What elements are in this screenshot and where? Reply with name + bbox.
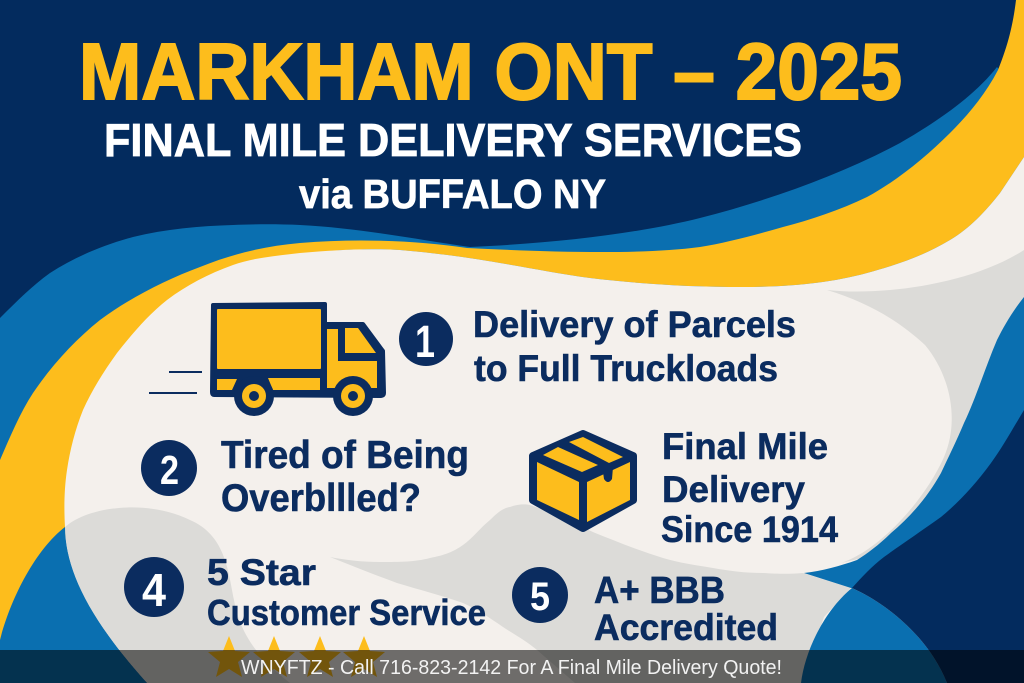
text: final mile since 1914: Final Mile: [662, 426, 828, 467]
rating stars: [208, 636, 385, 677]
text: tired of being overbilled: Overbllled?: [221, 477, 421, 520]
text: 5 star customer service: [207, 552, 486, 633]
badge: 5: 5: [530, 575, 550, 619]
text: final mile since 1914: Delivery: [662, 469, 805, 510]
badge: 1: [399, 312, 453, 367]
icon: parcel box: [533, 434, 633, 528]
badge: 4: 4: [142, 564, 166, 616]
text: 5 star customer service: Customer Service: [207, 592, 486, 633]
text: final mile since 1914: Since 1914: [661, 509, 838, 550]
subtitle: FINAL MILE DELIVERY SERVICES: [104, 114, 802, 166]
text: 5 star customer service: 5 Star: [207, 552, 316, 593]
footer banner: WNYFTZ - Call 716-823-2142 For A Final Mile Delivery Quote!: [241, 656, 782, 679]
badge: 2: 2: [160, 447, 179, 493]
badge: 2: [141, 440, 197, 496]
title: MARKHAM ONT – 2025: [79, 27, 902, 116]
text: final mile since 1914: [661, 426, 838, 550]
background: lower-left blue wave: [0, 527, 147, 683]
badge: 5: [512, 567, 568, 623]
background: left grey wave: [65, 507, 290, 683]
text: delivery of parcels: [473, 304, 796, 389]
background: lower-right blue wave: [801, 588, 947, 683]
text: tired of being overbilled: [221, 434, 469, 520]
text: a+ bbb accredited: Accredited: [594, 607, 778, 648]
footer banner: [0, 650, 1024, 683]
text: a+ bbb accredited: A+ BBB: [594, 570, 725, 612]
text: delivery of parcels: Delivery of Parcels: [473, 304, 796, 345]
text: a+ bbb accredited: [594, 570, 778, 648]
text: delivery of parcels: to Full Truckloads: [474, 348, 778, 389]
badge: 1: 1: [415, 316, 435, 367]
background: right blue wave: [804, 297, 1024, 620]
background: cream panel: [64, 157, 1024, 683]
background: right grey wave: [827, 250, 1024, 563]
icon: delivery truck: [149, 304, 384, 416]
text: tired of being overbilled: Tired of Being: [221, 434, 469, 477]
background: centre grey wave: [330, 504, 851, 683]
background: right navy wave: [852, 410, 1024, 683]
subtitle: origin: via BUFFALO NY: [299, 171, 606, 217]
badge: 4: [124, 557, 184, 617]
